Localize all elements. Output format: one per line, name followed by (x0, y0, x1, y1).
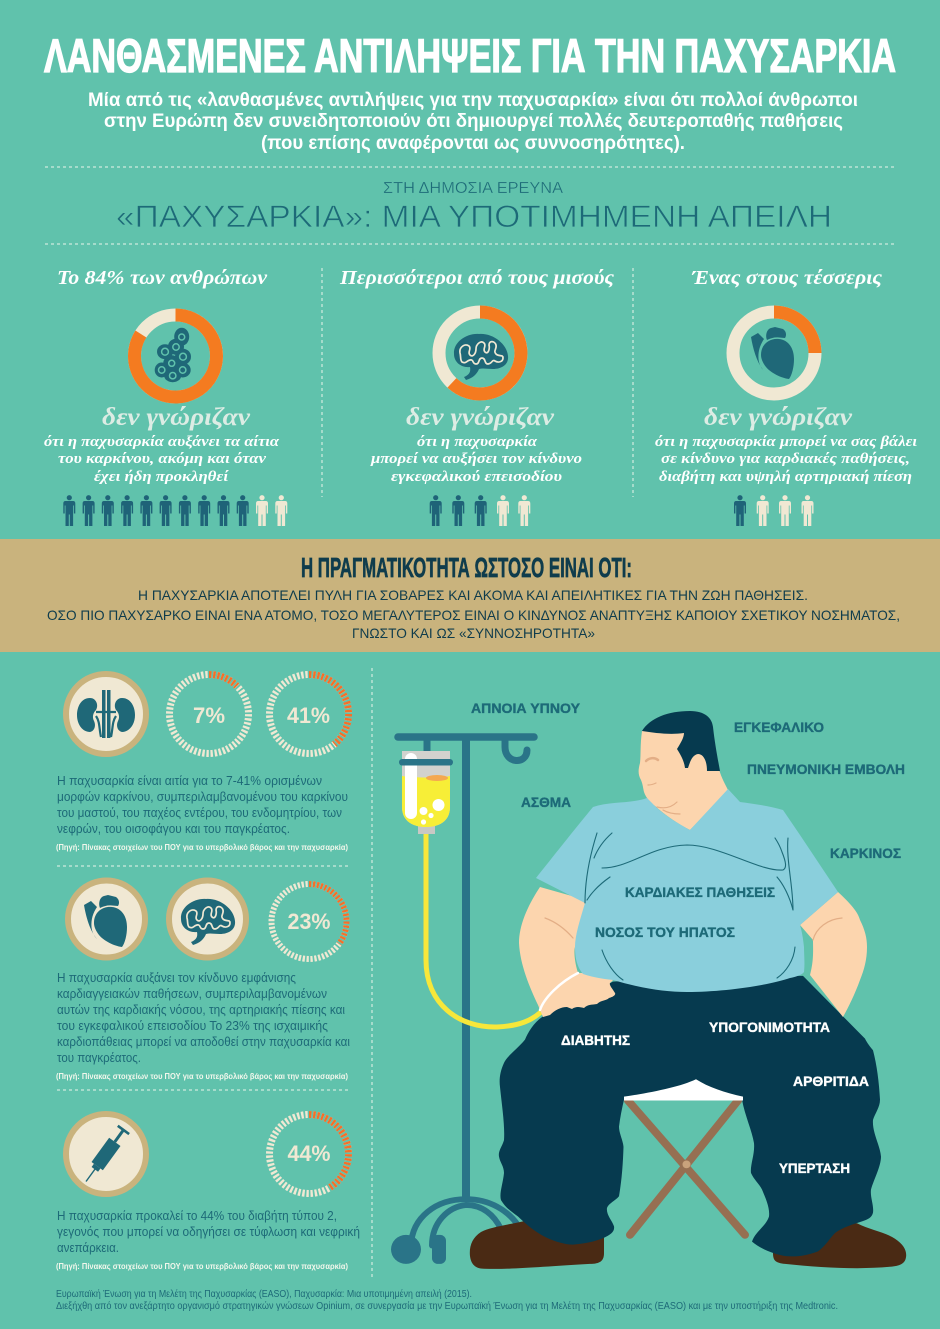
survey heading: «ΠΑΧΥΣΑΡΚΙΑ»: ΜΙΑ ΥΠΟΤΙΜΗΜΕΝΗ ΑΠΕΙΛΗ (116, 198, 832, 234)
paragraph: Η παχυσαρκία αυξάνει τον κίνδυνο εμφάνισης (57, 970, 296, 985)
pictogram: 1 of 4 people (734, 495, 814, 526)
description: διαβήτη και υψηλή αρτηριακή πίεση (659, 469, 912, 485)
icon: cancer cells (155, 328, 191, 382)
paragraph: καρδιαγγειακών παθήσεων, συμπεριλαμβανομένων (57, 986, 327, 1001)
skin folds (545, 783, 842, 940)
labels: conditions: ΚΑΡΚΙΝΟΣ (830, 846, 901, 861)
description (44, 434, 280, 485)
description: εγκεφαλικού επεισοδίου (391, 469, 562, 485)
neck and face (639, 728, 728, 830)
labels: conditions (471, 701, 905, 1176)
description: έχει ήδη προκληθεί (94, 469, 229, 485)
band text: ΟΣΟ ΠΙΟ ΠΑΧΥΣΑΡΚΟ ΕΙΝΑΙ ΕΝΑ ΑΤΟΜΟ, ΤΟΣΟ ΜΕΓΑΛΥΤΕΡΟΣ ΕΙΝΑΙ Ο ΚΙΝΔΥΝΟΣ ΑΝΑΠΤΥΞΗΣ ΚΑΠΟΙΟΥ ΣΧΕΤΙΚΟΥ ΝΟΣΗΜΑΤΟΣ, (47, 607, 900, 623)
bracelet (540, 973, 578, 1010)
icon: heart badge (68, 880, 145, 958)
paragraph: ανεπάρκεια. (57, 1240, 119, 1255)
trousers (499, 976, 881, 1256)
shirt folds (585, 833, 795, 980)
ring chart 41%: 41% (287, 703, 330, 728)
description: ότι η παχυσαρκία (417, 434, 538, 450)
panel: more than half, stroke (339, 267, 614, 526)
donut chart 84% (134, 315, 216, 397)
labels: conditions: ΥΠΕΡΤΑΣΗ (779, 1161, 850, 1176)
label: δεν γνώριζαν (704, 404, 853, 431)
band text: ΓΝΩΣΤΟ ΚΑΙ ΩΣ «ΣΥΝΝΟΣΗΡΟΤΗΤΑ» (352, 625, 595, 641)
eyebrow (646, 758, 658, 761)
source note: (Πηγή: Πίνακας στοιχείων του ΠΟΥ για το υπερβολικό βάρος και την παχυσαρκία) (56, 1261, 348, 1271)
labels: conditions: ΔΙΑΒΗΤΗΣ (561, 1033, 630, 1048)
stool (628, 1101, 745, 1235)
source note: (Πηγή: Πίνακας στοιχείων του ΠΟΥ για το υπερβολικό βάρος και την παχυσαρκία) (56, 1071, 348, 1081)
intro text: (που επίσης αναφέρονται ως συννοσηρότητες). (261, 133, 685, 154)
icon: heart (751, 327, 794, 379)
icon: brain (454, 334, 508, 380)
paragraph: νεφρών, του οισοφάγου και του παγκρέατος. (57, 821, 290, 836)
donut chart 62% (439, 312, 521, 394)
paragraph: του παγκρέατος. (57, 1050, 141, 1065)
heading: Το 84% των ανθρώπων (57, 267, 268, 289)
left arm (519, 887, 615, 1017)
labels: conditions: ΑΡΘΡΙΤΙΔΑ (793, 1074, 869, 1089)
label: δεν γνώριζαν (406, 404, 555, 431)
shoes (470, 1221, 906, 1269)
icon: syringe badge (66, 1114, 146, 1194)
survey kicker: ΣΤΗ ΔΗΜΟΣΙΑ ΕΡΕΥΝΑ (383, 180, 564, 197)
description: μπορεί να αυξήσει τον κίνδυνο (370, 451, 582, 467)
description: σε κίνδυνο για καρδιακές παθήσεις, (661, 451, 910, 467)
panel: reality band (0, 539, 940, 652)
paragraph: αυτών της καρδιακής νόσου, της αρτηριακής πίεσης και (57, 1002, 345, 1017)
description: ότι η παχυσαρκία μπορεί να σας βάλει (655, 434, 917, 450)
labels: conditions: ΑΣΘΜΑ (521, 795, 571, 810)
heading: Ένας στους τέσσερις (691, 267, 882, 289)
panel: 84 percent, cancer (44, 267, 287, 526)
pictogram: 3 of 5 people (430, 495, 530, 526)
intro text: στην Ευρώπη δεν συνειδητοποιούν ότι δημιουργεί πολλές δευτεροπαθής παθήσεις (104, 111, 843, 132)
donut chart 25% (733, 312, 815, 394)
paragraph: καρδιοπάθειας μπορεί να αποδοθεί στην παχυσαρκία και (57, 1034, 350, 1049)
stool seat (624, 1079, 743, 1101)
paragraph: μορφών καρκίνου, συμπεριλαμβανομένου του καρκίνου (57, 789, 348, 804)
ring chart 7%: 7% (193, 703, 225, 728)
description: ότι η παχυσαρκία αυξάνει τα αίτια (44, 434, 280, 450)
labels: conditions: ΥΠΟΓΟΝΙΜΟΤΗΤΑ (709, 1020, 830, 1035)
shirt (536, 789, 838, 992)
label: δεν γνώριζαν (102, 404, 251, 431)
description: του καρκίνου, ακόμη και όταν (58, 451, 266, 467)
labels: conditions: ΑΠΝΟΙΑ ΥΠΝΟΥ (471, 701, 580, 716)
ring chart 23%: 23% (288, 909, 330, 934)
footer credits: Ευρωπαϊκή Ένωση για τη Μελέτη της Παχυσαρκίας (EASO), Παχυσαρκία: Μια υποτιμημένη απειλή (2015). (56, 1288, 472, 1300)
panel: one in four, heart (655, 267, 917, 526)
intro text: Μία από τις «λανθασμένες αντιλήψεις για την παχυσαρκία» είναι ότι πολλοί άνθρωποι (88, 90, 858, 111)
ring chart 44%: 44% (288, 1141, 330, 1166)
source note: (Πηγή: Πίνακας στοιχείων του ΠΟΥ για το υπερβολικό βάρος και την παχυσαρκία) (56, 842, 348, 852)
IV tube (426, 832, 541, 1027)
labels: conditions: ΚΑΡΔΙΑΚΕΣ ΠΑΘΗΣΕΙΣ (625, 885, 775, 900)
description (655, 434, 917, 485)
paragraph (57, 1208, 360, 1255)
illustration: seated man (470, 711, 906, 1269)
intro text (88, 90, 858, 154)
description (370, 434, 582, 485)
ring chart 44% (270, 1114, 348, 1194)
panel: cancer facts (56, 674, 349, 852)
pictogram: 10 of 12 people (63, 495, 287, 526)
paragraph (57, 970, 350, 1065)
panel: diabetes facts (56, 1114, 360, 1271)
icon: kidneys (66, 674, 146, 754)
footer credits: Διεξήχθη από τον ανεξάρτητο οργανισμό στρατηγικών γνώσεων Opinium, σε συνεργασία με την Ευρωπαϊκή Ένωση για τη Μελέτη της Παχυσαρκίας (EASO) και με την υποστήριξη της Medtronic. (56, 1300, 838, 1312)
panel: heart and stroke facts (56, 880, 350, 1081)
footer credits (56, 1288, 838, 1312)
paragraph (57, 773, 348, 836)
ring chart 7% (170, 674, 248, 754)
paragraph: Η παχυσαρκία προκαλεί το 44% του διαβήτη τύπου 2, (57, 1208, 337, 1223)
IV bag (399, 751, 453, 834)
paragraph: του μαστού, του παχέος εντέρου, του ενδομητρίου, των (57, 805, 342, 820)
icon: brain badge (169, 880, 246, 958)
ring chart 41% (270, 674, 349, 754)
band heading: Η ΠΡΑΓΜΑΤΙΚΟΤΗΤΑ ΩΣΤΟΣΟ ΕΙΝΑΙ ΟΤΙ: (301, 552, 632, 583)
labels: conditions: ΠΝΕΥΜΟΝΙΚΗ ΕΜΒΟΛΗ (747, 762, 905, 777)
paragraph: Η παχυσαρκία είναι αιτία για το 7-41% ορισμένων (57, 773, 322, 788)
band text (47, 587, 900, 641)
heading: Περισσότεροι από τους μισούς (339, 267, 614, 289)
paragraph: του εγκεφαλικού επεισοδίου Το 23% της ισχαιμικής (57, 1018, 328, 1033)
band text: Η ΠΑΧΥΣΑΡΚΙΑ ΑΠΟΤΕΛΕΙ ΠΥΛΗ ΓΙΑ ΣΟΒΑΡΕΣ ΚΑΙ ΑΚΟΜΑ ΚΑΙ ΑΠΕΙΛΗΤΙΚΕΣ ΓΙΑ ΤΗΝ ΖΩΗ ΠΑΘΗΣΕΙΣ. (138, 587, 808, 603)
labels: conditions: ΕΓΚΕΦΑΛΙΚΟ (734, 720, 824, 735)
ring chart 23% (272, 884, 346, 959)
illustration: IV stand (391, 737, 541, 1264)
right arm (800, 892, 867, 1017)
hair (642, 711, 720, 771)
labels: conditions: ΝΟΣΟΣ ΤΟΥ ΗΠΑΤΟΣ (595, 925, 735, 940)
paragraph: γεγονός που μπορεί να οδηγήσει σε τύφλωση και νεφρική (57, 1224, 360, 1239)
